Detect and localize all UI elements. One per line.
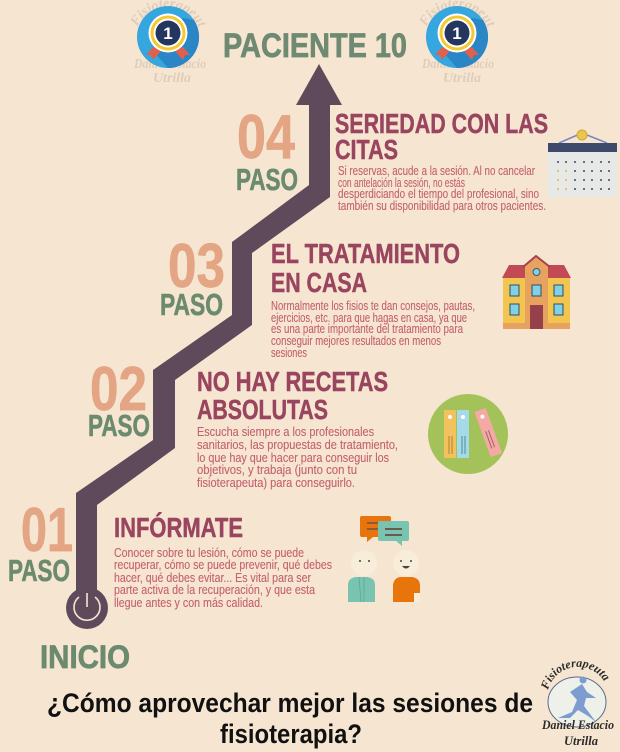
number 04: 04 [237, 103, 295, 172]
body text: llegue antes y con más calidad. [114, 596, 263, 610]
body text: con antelación la sesión, no estás [338, 176, 465, 190]
logo: fisioterapeuta [541, 661, 614, 748]
panel: paso 03 [160, 232, 475, 360]
body text: desperdiciando el tiempo del profesional, sino [338, 187, 539, 201]
paso label: PASO [8, 553, 70, 588]
number 03: 03 [168, 232, 225, 301]
body text: hacer, qué debes evitar... Es vital para ser [114, 571, 311, 585]
body text: Normalmente los fisios te dan consejos, pautas, [271, 299, 475, 313]
heading: EL TRATAMIENTO [271, 238, 460, 269]
icon: left medal: Daniel Estacio [133, 57, 206, 72]
heading [335, 108, 548, 165]
body text: lo que hay que hacer para conseguir los [197, 451, 389, 465]
body text [114, 546, 332, 610]
heading: EN CASA [271, 267, 367, 298]
body text [197, 425, 398, 490]
title: ¿Cómo aprovechar mejor las sesiones de [47, 688, 533, 718]
heading: CITAS [335, 134, 398, 165]
icon: right medal: 1 [452, 24, 462, 43]
icon: house [502, 256, 571, 329]
body text: parte activa de la recuperación, y que esta [114, 583, 315, 597]
body text: también su disponibilidad para otros pacientes. [338, 199, 546, 213]
body text: Si reservas, acude a la sesión. Al no cancelar [338, 164, 535, 178]
paso label: PASO [236, 162, 298, 197]
body text: ejercicios, etc. para que hagas en casa, ya que [271, 311, 467, 325]
logo: fisioterapeuta: Utrilla [564, 734, 598, 748]
body text: Conocer sobre tu lesión, cómo se puede [114, 546, 304, 560]
panel: paso 01 [8, 496, 332, 610]
heading: NO HAY RECETAS [197, 366, 388, 397]
body text: conseguir mejores resultados en menos [271, 334, 441, 348]
paso label: PASO [88, 408, 150, 443]
body text [338, 164, 546, 213]
logo: fisioterapeuta: Daniel Estacio [541, 718, 614, 732]
heading: ABSOLUTAS [197, 394, 328, 425]
heading: INFÓRMATE [114, 512, 243, 543]
logo: fisioterapeuta: Fisioterapeuta [541, 661, 609, 690]
panel: paso 04 [236, 103, 548, 213]
number 02: 02 [90, 355, 147, 424]
icon: right medal [419, 0, 495, 86]
body text: objetivos, y trabaja (junto con tu [197, 463, 357, 477]
number 01: 01 [21, 496, 73, 565]
icon: right medal: Daniel Estacio [421, 57, 494, 72]
body text [271, 299, 475, 360]
panel: paso 02 [88, 355, 398, 490]
icon: binders [428, 394, 508, 474]
heading [197, 366, 388, 425]
icon: two people talking [348, 516, 420, 602]
icon: calendar [548, 130, 617, 197]
title [47, 688, 533, 749]
body text: Escucha siempre a los profesionales [197, 425, 374, 439]
body text: fisioterapeuta) para conseguirlo. [197, 476, 355, 490]
paso label: PASO [160, 287, 223, 322]
staircase arrow [66, 64, 342, 629]
icon: left medal: 1 [163, 24, 173, 43]
icon: left medal [130, 0, 206, 86]
label: inicio: INICIO [40, 639, 130, 675]
heading: paciente 10: PACIENTE 10 [223, 27, 407, 65]
icon: power symbol [74, 593, 100, 620]
body text: sesiones [271, 346, 307, 360]
title: fisioterapia? [220, 719, 362, 749]
body text: recuperar, cómo se puede prevenir, qué debes [114, 558, 332, 572]
body text: sanitarios, las propuestas de tratamiento, [197, 438, 398, 452]
icon: left medal: Utrilla [153, 71, 191, 86]
heading: SERIEDAD CON LAS [335, 108, 548, 139]
heading [271, 238, 460, 298]
icon: right medal: Utrilla [443, 71, 481, 86]
body text: es una parte importante del tratamiento para [271, 322, 463, 336]
